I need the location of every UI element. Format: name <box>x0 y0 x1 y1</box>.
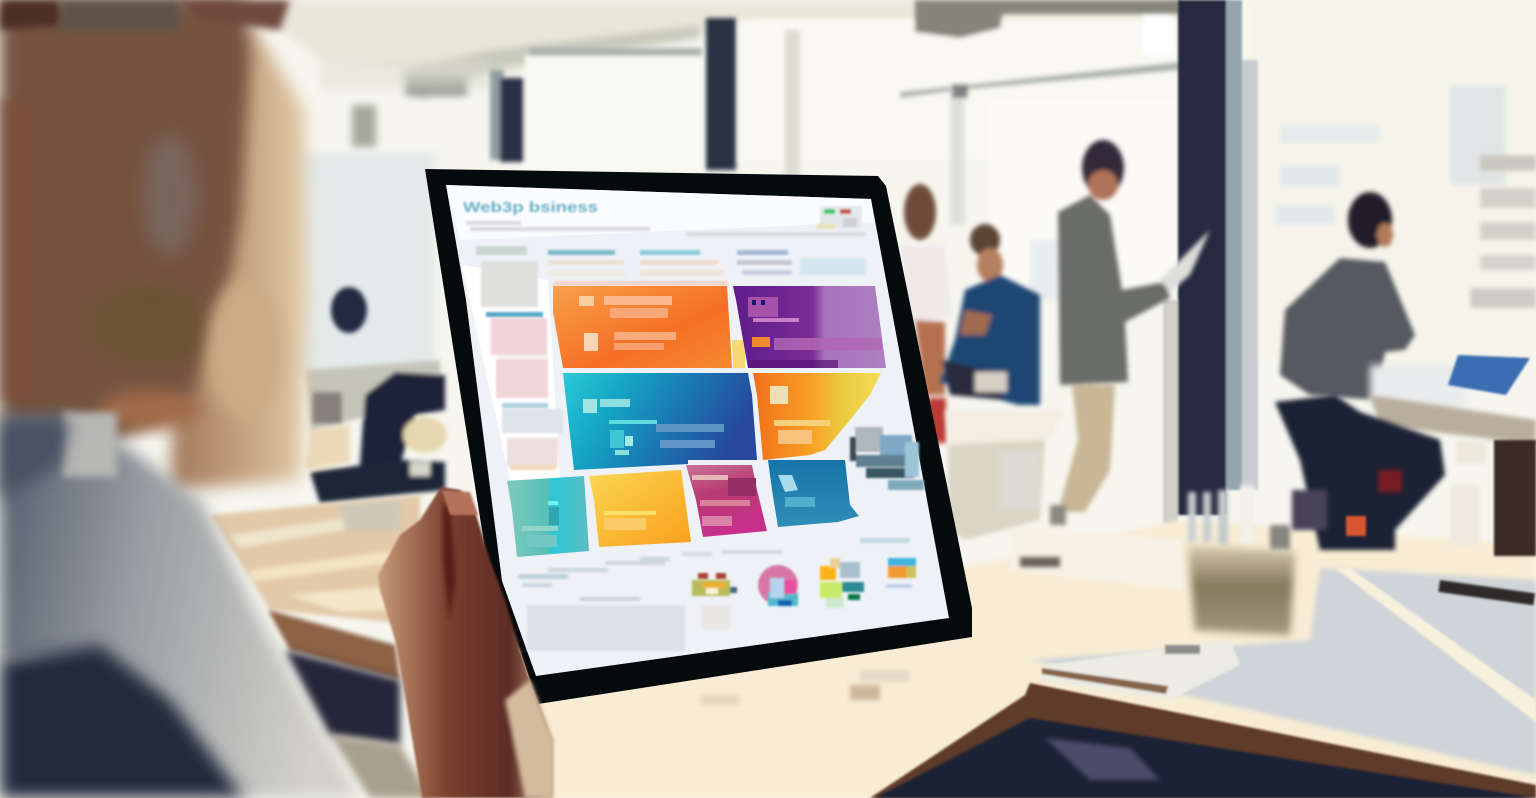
dark floor <box>875 718 1536 798</box>
dark arm and wood edge under the desk <box>268 610 430 798</box>
white desk behind <box>945 410 1065 540</box>
orange and yellow panel <box>753 373 881 460</box>
screen subtitle lines <box>466 221 866 236</box>
right window and skyline <box>1250 0 1536 360</box>
tablet screen title: Web3p bsiness <box>463 199 598 216</box>
column headers <box>548 250 866 286</box>
sidebar text blocks <box>476 246 563 470</box>
desk items: pen and paper <box>1040 580 1535 700</box>
pot with pens <box>1188 485 1295 635</box>
tablet frame <box>425 169 972 704</box>
seated man <box>940 224 1040 405</box>
blue laptop <box>1448 355 1530 395</box>
teal panel <box>507 476 589 557</box>
tablet screen <box>446 185 949 676</box>
standing woman <box>900 184 952 443</box>
magenta panel <box>686 465 767 537</box>
person head (foreground, out of focus) <box>0 0 308 490</box>
hand holding tablet <box>378 487 553 798</box>
dark box <box>1494 440 1536 556</box>
white floor plane behind <box>1010 525 1185 590</box>
small blue panel <box>768 460 859 527</box>
bottom text lines <box>518 538 910 651</box>
icon: multicolor cluster <box>820 558 864 608</box>
grey right desk <box>1030 568 1536 775</box>
icon: orange card <box>886 558 916 588</box>
white wall <box>300 152 435 377</box>
person shoulder and shirt <box>0 412 360 798</box>
crumbs on table <box>700 670 910 705</box>
office chair <box>1275 395 1445 550</box>
ceiling <box>240 0 1180 147</box>
background seats <box>305 360 447 503</box>
blue panel <box>563 373 757 470</box>
dark jacket sleeve <box>0 645 245 798</box>
screen logo <box>817 206 862 229</box>
window panes <box>490 0 1180 300</box>
icon: pink blue ring <box>758 565 798 606</box>
standing man with tablet <box>1020 140 1210 567</box>
icon: yellow green badge <box>692 573 737 596</box>
man seen from behind <box>1280 192 1415 400</box>
table edge <box>870 683 1536 798</box>
small chart collage <box>850 427 924 490</box>
table top <box>380 520 1536 798</box>
tablet <box>425 169 972 704</box>
purple panel <box>733 286 886 368</box>
yellow panel <box>589 470 691 547</box>
back table, laptop and boxes <box>1370 355 1536 556</box>
structural pillar <box>1163 0 1258 525</box>
orange panel <box>553 286 745 368</box>
left desk <box>210 495 420 625</box>
highlight on desk <box>1335 568 1536 722</box>
background person head <box>331 287 367 333</box>
